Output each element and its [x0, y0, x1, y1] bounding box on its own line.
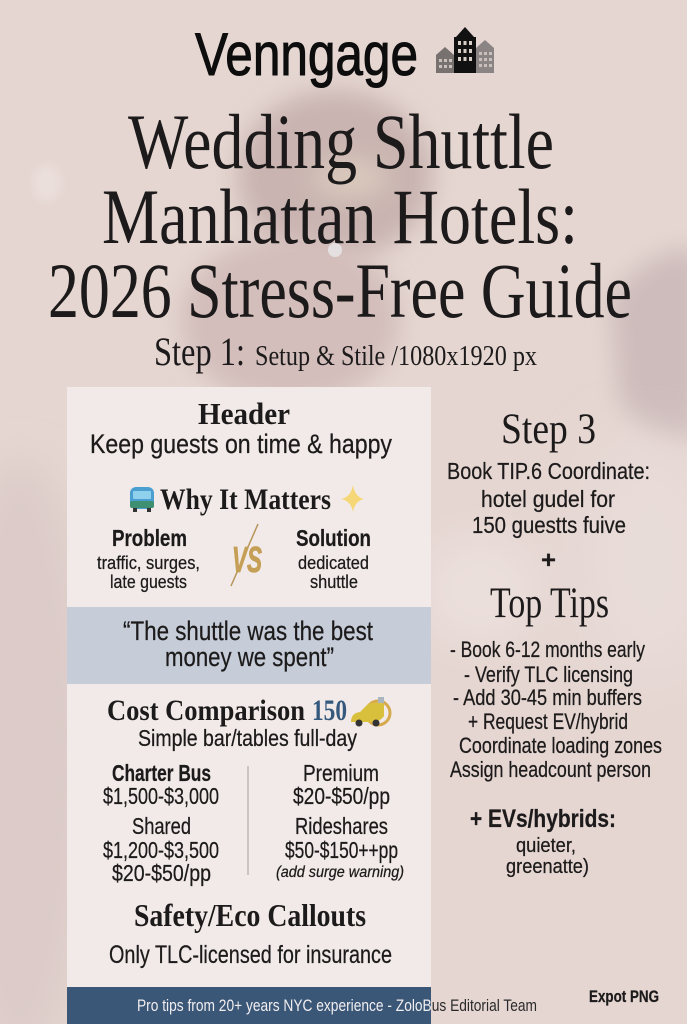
title: Manhattan Hotels:	[102, 173, 578, 260]
panel: main card	[67, 387, 431, 1024]
title	[48, 98, 632, 334]
table: left prices: $20-$50/pp	[112, 860, 211, 886]
heading: cost comparison: Cost Comparison	[107, 694, 305, 727]
panel: step 3: 150 guestts fuive	[472, 512, 626, 538]
panel: top tips: + Request EV/hybrid	[468, 709, 628, 734]
plus sign: +	[541, 547, 556, 574]
quote band: money we spent”	[165, 642, 334, 672]
icon: city buildings	[436, 27, 494, 73]
table: right prices: $50-$150++pp	[285, 837, 398, 863]
panel: top tips: - Add 30-45 min buffers	[453, 685, 642, 710]
panel: top tips: Top Tips	[490, 580, 609, 627]
column: solution	[296, 525, 371, 592]
panel: step 3: Book TIP.6 Coordinate:	[447, 458, 650, 484]
table: right prices: (add surge warning)	[276, 864, 404, 881]
panel: EV callout: quieter,	[516, 835, 576, 857]
panel: step 3: hotel gudel for	[481, 486, 615, 512]
column: solution: shuttle	[310, 572, 358, 592]
footer band	[67, 987, 431, 1024]
text: export label: Expot PNG	[589, 987, 659, 1006]
panel: top tips: - Verify TLC licensing	[464, 662, 633, 687]
table: left prices: $1,500-$3,000	[103, 783, 219, 809]
quote band: “The shuttle was the best	[123, 616, 373, 646]
column: problem: traffic, surges,	[97, 553, 200, 573]
table: right prices	[276, 760, 404, 881]
subtitle: step 1: Setup & Stile /1080x1920 px	[255, 340, 537, 372]
panel: EV callout	[470, 805, 616, 878]
column: problem	[97, 525, 200, 592]
panel: EV callout: + EVs/hybrids:	[470, 805, 616, 833]
panel: EV callout: greenatte)	[506, 856, 589, 878]
subtitle: step 1	[154, 329, 537, 374]
panel: step 3: Step 3	[501, 406, 596, 453]
table: right prices: $20-$50/pp	[293, 783, 390, 809]
table: left prices: $1,200-$3,500	[103, 837, 219, 863]
column: solution: dedicated	[298, 553, 369, 573]
icon: sparkle	[341, 485, 364, 512]
icon: car and ring	[351, 697, 390, 726]
text: tagline: Keep guests on time & happy	[90, 429, 392, 459]
column: problem: late guests	[110, 572, 187, 592]
table: left prices	[103, 760, 219, 886]
heading: safety eco callouts: Safety/Eco Callouts	[134, 897, 366, 933]
quote band	[67, 607, 431, 684]
table: left prices: Charter Bus	[112, 760, 211, 786]
subtitle: step 1: Step 1:	[154, 329, 245, 374]
logo: Venngage: Venngage	[195, 21, 418, 88]
title: Wedding Shuttle	[128, 98, 554, 185]
icon: versus	[231, 524, 262, 586]
column: solution: Solution	[296, 525, 371, 551]
text: cost subtitle: Simple bar/tables full-day	[138, 725, 357, 751]
icon: bus	[130, 487, 154, 512]
table: left prices: Shared	[132, 813, 191, 839]
text: safety note: Only TLC-licensed for insurance	[109, 941, 392, 969]
table: right prices: Premium	[303, 760, 379, 786]
column: problem: Problem	[112, 525, 187, 551]
text: footer credit: Pro tips from 20+ years NYC experience - ZoloBus Editorial Team	[137, 996, 537, 1015]
panel: top tips	[450, 580, 662, 782]
panel: step 3	[447, 406, 650, 538]
heading: header: Header	[198, 396, 290, 431]
table: right prices: Rideshares	[295, 813, 388, 839]
icon: versus: VS	[232, 539, 262, 580]
heading: cost comparison: 150	[312, 694, 347, 727]
icon: small clock	[328, 243, 342, 257]
heading: why it matters: Why It Matters	[160, 483, 331, 516]
